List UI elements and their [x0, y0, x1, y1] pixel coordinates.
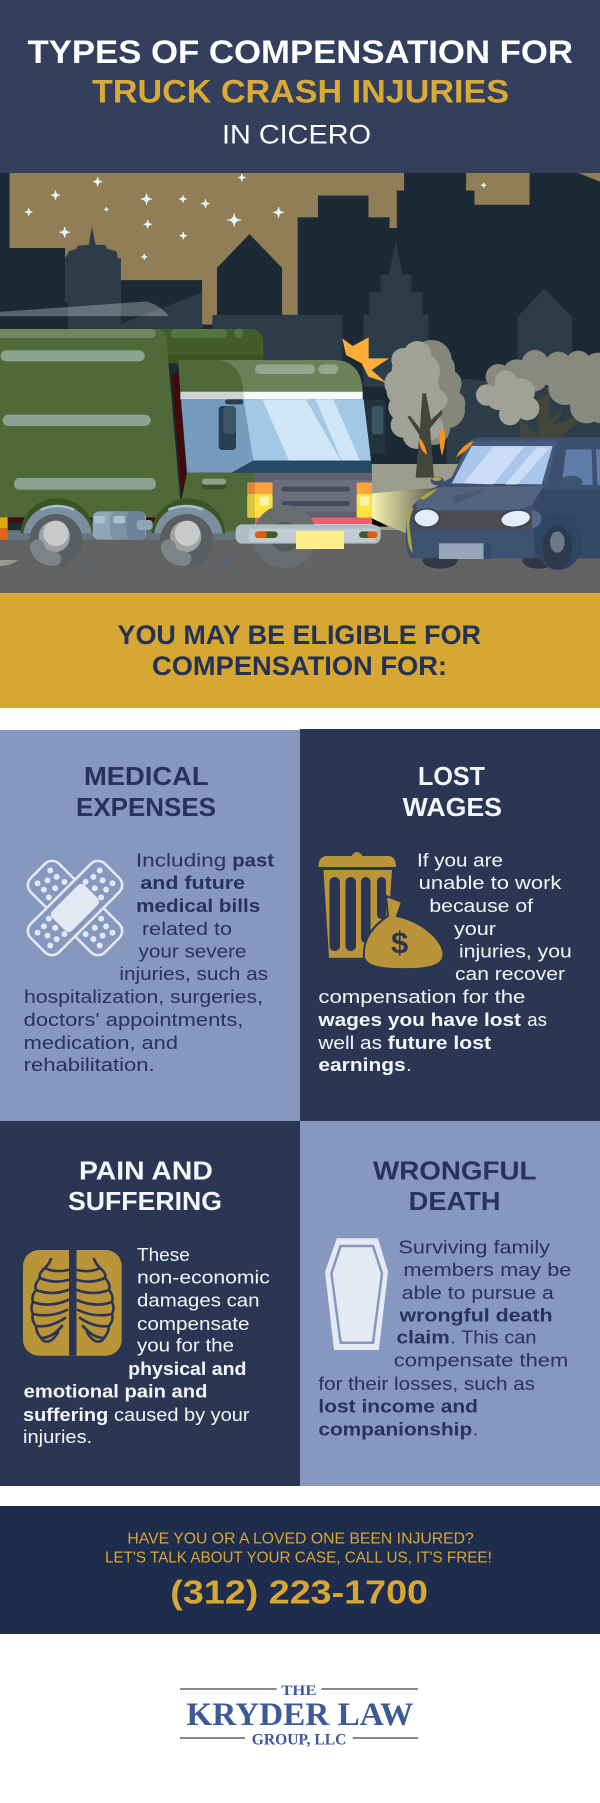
body text: Surviving family: [398, 1237, 550, 1257]
body text: companionship: [318, 1420, 472, 1440]
truck: [0, 329, 381, 568]
heading: medical expenses: [76, 761, 216, 822]
body text: caused by your: [114, 1405, 250, 1425]
body text: wrongful death: [398, 1306, 553, 1326]
body text: hospitalization, surgeries,: [24, 987, 263, 1007]
heading: lost wages: LOST: [418, 761, 485, 791]
body text: because of: [429, 896, 534, 916]
body text: . This can: [450, 1327, 536, 1347]
panel: medical expenses: [0, 730, 300, 1121]
headlight beam and car: [372, 437, 600, 570]
logo: The Kryder Law Group, LLC: GROUP, LLC: [252, 1731, 346, 1748]
body text: damages can: [137, 1291, 260, 1311]
title line 1: TYPES OF COMPENSATION FOR: [28, 34, 573, 70]
icon: ribcage: [23, 1250, 122, 1356]
heading: pain and suffering: SUFFERING: [68, 1186, 222, 1216]
phone number: (312) 223-1700: [170, 1573, 428, 1610]
icon: trash can with money bag: [318, 852, 444, 969]
heading: medical expenses: MEDICAL: [84, 761, 209, 791]
heading: wrongful death: DEATH: [409, 1186, 500, 1216]
body text: future lost: [388, 1033, 491, 1053]
body text: injuries.: [23, 1427, 92, 1447]
body text: well as: [317, 1033, 382, 1053]
body text: .: [473, 1420, 478, 1440]
body text: your severe: [138, 942, 246, 962]
title line 3: IN CICERO: [222, 120, 371, 150]
body text: non-economic: [137, 1268, 270, 1288]
city skyline background: [0, 173, 600, 594]
panel: wrongful death: [300, 1121, 600, 1486]
heading: lost wages: [403, 761, 502, 822]
body text: related to: [142, 919, 232, 939]
body text: injuries, you: [459, 942, 572, 962]
body text: earnings: [318, 1055, 406, 1075]
body text: compensation for the: [318, 987, 525, 1007]
title line 2: TRUCK CRASH INJURIES: [92, 74, 509, 110]
icon: coffin: [325, 1238, 388, 1350]
gold banner: eligibility heading: YOU MAY BE ELIGIBLE FOR: [118, 620, 481, 650]
body text: lost income and: [318, 1397, 478, 1417]
panel: pain and suffering: [0, 1121, 300, 1486]
body text: unable to work: [419, 873, 563, 893]
body text: suffering: [23, 1405, 108, 1425]
body text: doctors' appointments,: [24, 1010, 243, 1030]
icon: trash can with money bag: $: [391, 925, 408, 960]
body text: [317, 850, 572, 1075]
icon: crossed bandages: [24, 857, 126, 959]
body text: If you are: [417, 850, 503, 870]
logo: The Kryder Law Group, LLC: KRYDER LAW: [186, 1697, 413, 1733]
logo: The Kryder Law Group, LLC: [180, 1683, 418, 1748]
body text: medical bills: [136, 896, 260, 916]
body text: can recover: [455, 964, 565, 984]
heading: pain and suffering: PAIN AND: [79, 1156, 213, 1186]
body text: rehabilitation.: [24, 1055, 155, 1075]
heading: wrongful death: [373, 1156, 537, 1216]
stars: [25, 174, 486, 260]
tree left: [412, 340, 465, 445]
body text: These: [137, 1245, 190, 1265]
body text: emotional pain and: [24, 1382, 207, 1402]
body text: past: [232, 850, 274, 870]
body text: able to pursue a: [402, 1283, 555, 1303]
heading: medical expenses: EXPENSES: [76, 792, 216, 822]
call to action band: LET'S TALK ABOUT YOUR CASE, CALL US, IT'S FREE!: [105, 1549, 492, 1566]
call to action text: HAVE YOU OR A LOVED ONE BEEN INJURED?: [127, 1530, 474, 1547]
logo: The Kryder Law Group, LLC: THE: [281, 1683, 316, 1699]
body text: injuries, such as: [119, 964, 268, 984]
body text: [24, 850, 274, 1075]
gold banner: eligibility heading: COMPENSATION FOR:: [152, 651, 447, 681]
body text: [23, 1245, 270, 1447]
title banner: [0, 0, 600, 173]
call to action band: [0, 1506, 600, 1634]
heading: pain and suffering: [68, 1156, 222, 1216]
truck wheels: [253, 505, 317, 568]
body text: for their losses, such as: [318, 1374, 535, 1394]
body text: and future: [140, 873, 245, 893]
gold banner: eligibility heading: [0, 593, 600, 708]
body text: Including: [136, 850, 226, 870]
body text: members may be: [403, 1260, 571, 1280]
street, trees and impact star: [0, 337, 600, 597]
body text: compensate them: [394, 1351, 568, 1371]
panel: lost wages: [300, 729, 600, 1121]
body text: medication, and: [24, 1033, 178, 1053]
truck headlights: [247, 482, 273, 494]
body text: you for the: [137, 1336, 234, 1356]
body text: [318, 1237, 571, 1440]
heading: wrongful death: WRONGFUL: [373, 1156, 537, 1186]
body text: your: [454, 919, 496, 939]
body text: .: [406, 1055, 411, 1075]
heading: lost wages: WAGES: [403, 792, 502, 822]
body text: wages you have lost: [317, 1010, 521, 1030]
body text: as: [527, 1010, 547, 1030]
body text: physical and: [128, 1359, 246, 1379]
body text: compensate: [137, 1314, 250, 1334]
body text: claim: [396, 1327, 450, 1347]
tree right: [520, 393, 582, 437]
illustration: night city truck crash scene: [0, 173, 600, 597]
